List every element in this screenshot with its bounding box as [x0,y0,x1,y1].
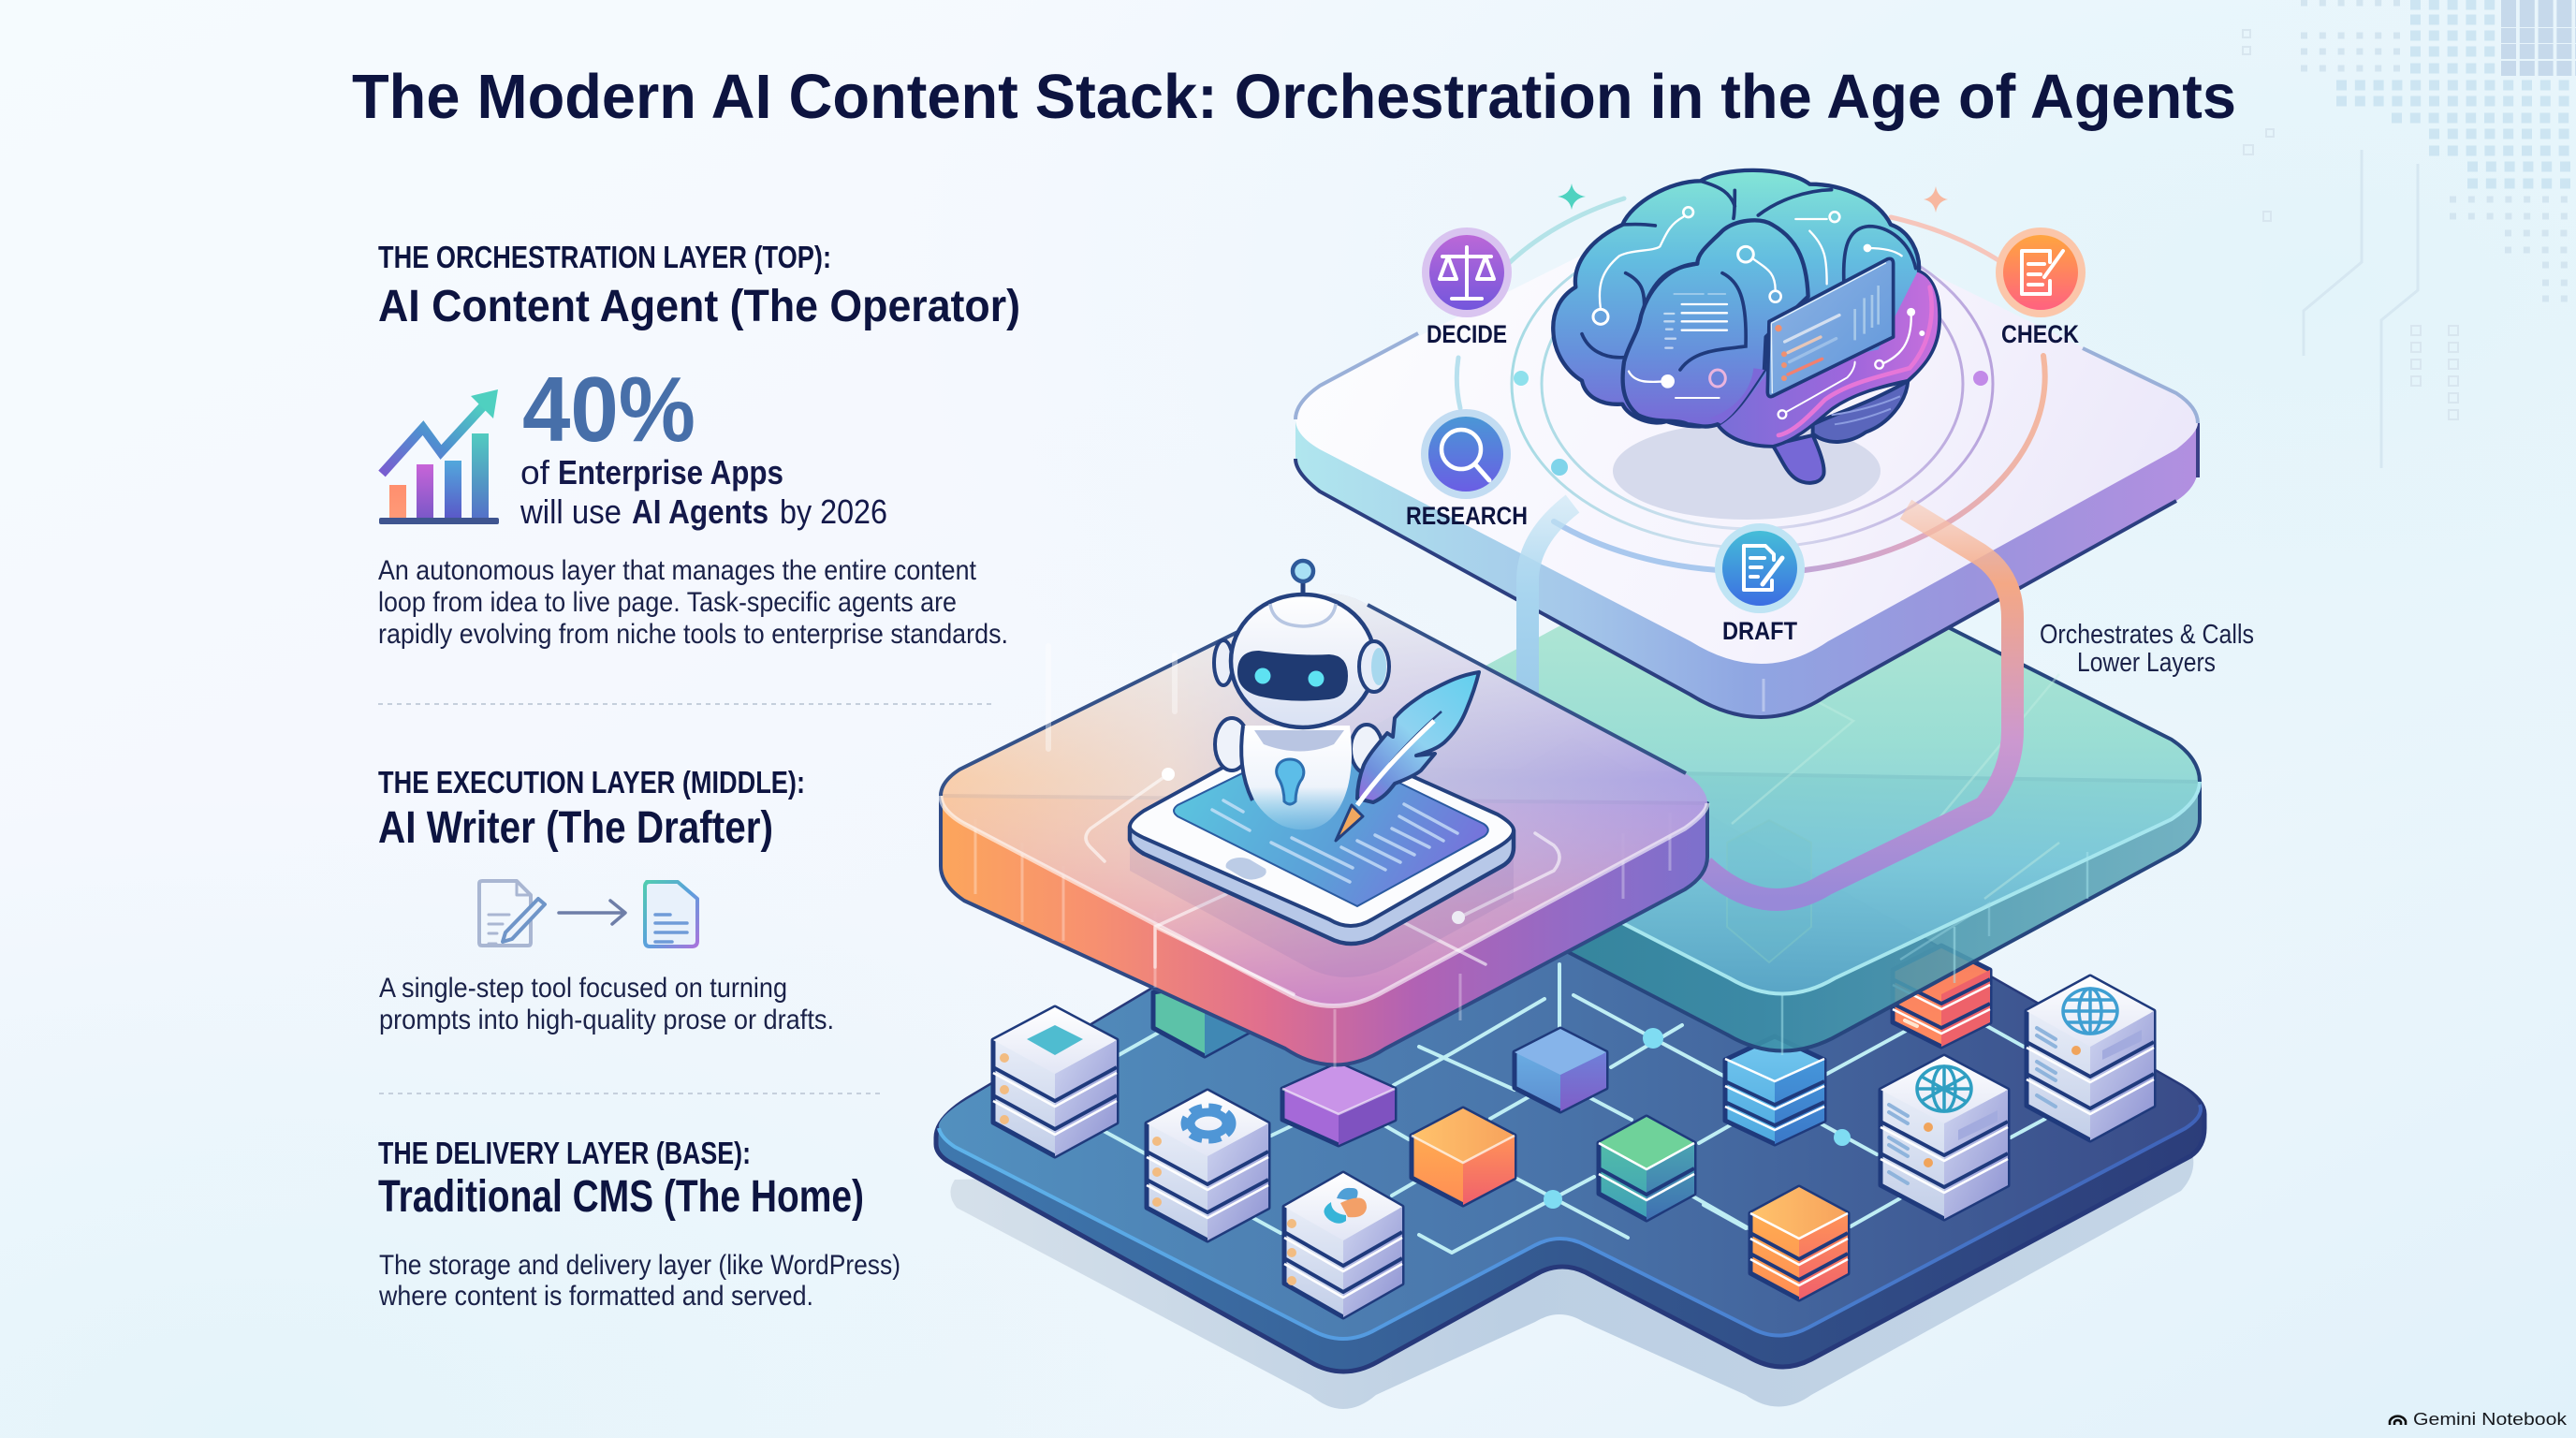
execution eyebrow: THE EXECUTION LAYER (MIDDLE): [378,765,805,800]
platform shadow [950,1147,2193,1409]
icon: magnifier [1442,430,1489,480]
block: gear server stack [1147,1091,1268,1240]
icon: gemini arcs [2390,1416,2406,1425]
front lobe [1623,220,1808,427]
platform top [939,740,2201,1339]
connector tube: right orange to purple [1704,509,2012,900]
robot left ear [1214,640,1233,685]
icon: gear [1185,1108,1232,1139]
robot chest light [1277,759,1304,804]
title: The Modern AI Content Stack: Orchestration in the Age of Agents [352,62,2236,132]
decorative data grid top right [2243,3,2576,468]
stat 40%: 40% [522,358,695,461]
execution slab reflections [975,813,1670,1068]
block: teal-top server stack [993,1007,1117,1156]
block: orange stack [1750,1187,1848,1299]
block: green stack [1599,1117,1694,1220]
execution heading: AI Writer (The Drafter) [378,803,773,853]
icon node: draft [1715,523,1805,613]
feather vane [1357,672,1479,802]
orbit dots [1514,371,1988,476]
feather shaft [1357,721,1434,805]
cerebellum [1813,381,1908,442]
icon: teal sparkle [1558,183,1586,210]
robot eyes [1254,668,1324,687]
tablet body [1130,827,1514,944]
glass platform: green right slab [1324,536,2200,1055]
block: purple cube [1282,1064,1395,1145]
feather quill [1336,672,1479,841]
stat caption: will use [520,492,622,531]
white slab side [1295,419,2198,717]
icon node: decide [1422,227,1512,317]
robot left arm [1215,718,1249,770]
stat caption: of [520,453,550,492]
network connector lines [1093,964,2045,1253]
icon: globe [2063,989,2117,1034]
orchestration eyebrow: THE ORCHESTRATION LAYER (TOP): [378,240,831,274]
green slab top [1336,536,2200,994]
robot antenna [1293,561,1313,605]
annotation: orchestrates and calls: Orchestrates & Calls [2040,620,2254,650]
icon: growth chart [379,389,499,524]
execution slab top [941,594,1707,1006]
label: draft: DRAFT [1722,617,1797,645]
tablet screen [1174,740,1488,906]
feather nib [1336,805,1363,841]
purple lobe [1720,272,1938,445]
tablet home button [1226,858,1266,880]
block: red stack [1893,946,1990,1047]
base platform: delivery layer [936,740,2204,1409]
execution circuit traces [1048,646,1559,994]
orchestration description [378,555,1008,650]
panel: delivery layer text [378,1136,900,1312]
white slab top [1295,178,2198,664]
ghost cube under glass [1727,820,1811,962]
stat caption [520,453,887,531]
floating screen [1767,258,1894,397]
block: blue stack [1725,1036,1824,1144]
robot body [1242,726,1352,829]
execution description: A single-step tool focused on turning [379,973,787,1004]
delivery description [378,1250,900,1312]
platform: white orchestration slab [1295,178,2198,717]
tablet [1130,726,1514,977]
orchestration description: An autonomous layer that manages the entire content [378,555,977,586]
circuit traces [1593,207,1925,418]
robot visor [1237,651,1348,701]
robot right arm [1351,725,1383,773]
delivery heading: Traditional CMS (The Home) [378,1172,864,1222]
icon: logo [1324,1188,1367,1224]
stat caption: AI Agents [632,492,768,531]
stat caption: Enterprise Apps [558,453,783,492]
robot [1214,561,1389,829]
icon: globe [1917,1066,1971,1111]
icon: document with pen [1744,546,1782,590]
feather dark barb [1390,712,1442,763]
icon: prompt to draft [479,881,697,946]
icon: orange sparkle [1924,186,1948,213]
label: decide: DECIDE [1427,320,1507,348]
block: orange cube [1412,1108,1515,1205]
execution slab side [941,796,1707,1065]
network nodes [1544,1028,1851,1209]
delivery description: The storage and delivery layer (like WordPress) [379,1250,900,1281]
brain shadow ellipse [1613,422,1881,520]
panel: execution layer text [378,765,834,1035]
watermark: Gemini Notebook: Gemini Notebook [2413,1410,2568,1429]
orchestration description: rapidly evolving from niche tools to enterprise standards. [378,619,1008,650]
brain silhouette [1553,170,1939,447]
screen text lines [1212,800,1457,882]
execution description: prompts into high-quality prose or drafts. [379,1005,834,1035]
annotation: orchestrates and calls [2040,620,2254,678]
connector tube: left blue [1528,504,1573,693]
execution description [379,973,834,1035]
label: check: CHECK [2001,320,2079,348]
icon node: research [1421,409,1511,499]
glass platform: execution slab [941,594,1707,1068]
block: crystal cube [1515,1029,1606,1111]
block: hidden green cube [1153,974,1256,1056]
stat caption: by 2026 [780,492,887,531]
block: server stack with globe, back [2027,976,2154,1140]
green slab side [1324,768,2200,1050]
robot head [1231,594,1375,727]
platform side [936,740,2204,1372]
delivery description: where content is formatted and served. [378,1281,813,1312]
sulcus lines [1582,181,1916,370]
orchestration description: loop from idea to live page. Task-specific agents are [378,587,957,618]
label: research: RESEARCH [1406,502,1528,530]
brain [1553,170,1939,483]
orchestration heading: AI Content Agent (The Operator) [378,282,1020,331]
icon node: check [1996,227,2086,317]
panel: orchestration layer text [378,240,1020,650]
orbit rings [1456,198,2045,570]
block: logo server stack [1284,1173,1402,1317]
icon: checklist [2022,251,2063,294]
annotation: orchestrates and calls: Lower Layers [2077,648,2216,678]
icon: scales [1440,247,1494,299]
robot right ear [1359,641,1389,692]
delivery eyebrow: THE DELIVERY LAYER (BASE): [378,1136,751,1170]
tablet shadow [1130,847,1514,977]
block: server stack with globe, front [1881,1056,2008,1219]
brain stem [1772,435,1824,483]
